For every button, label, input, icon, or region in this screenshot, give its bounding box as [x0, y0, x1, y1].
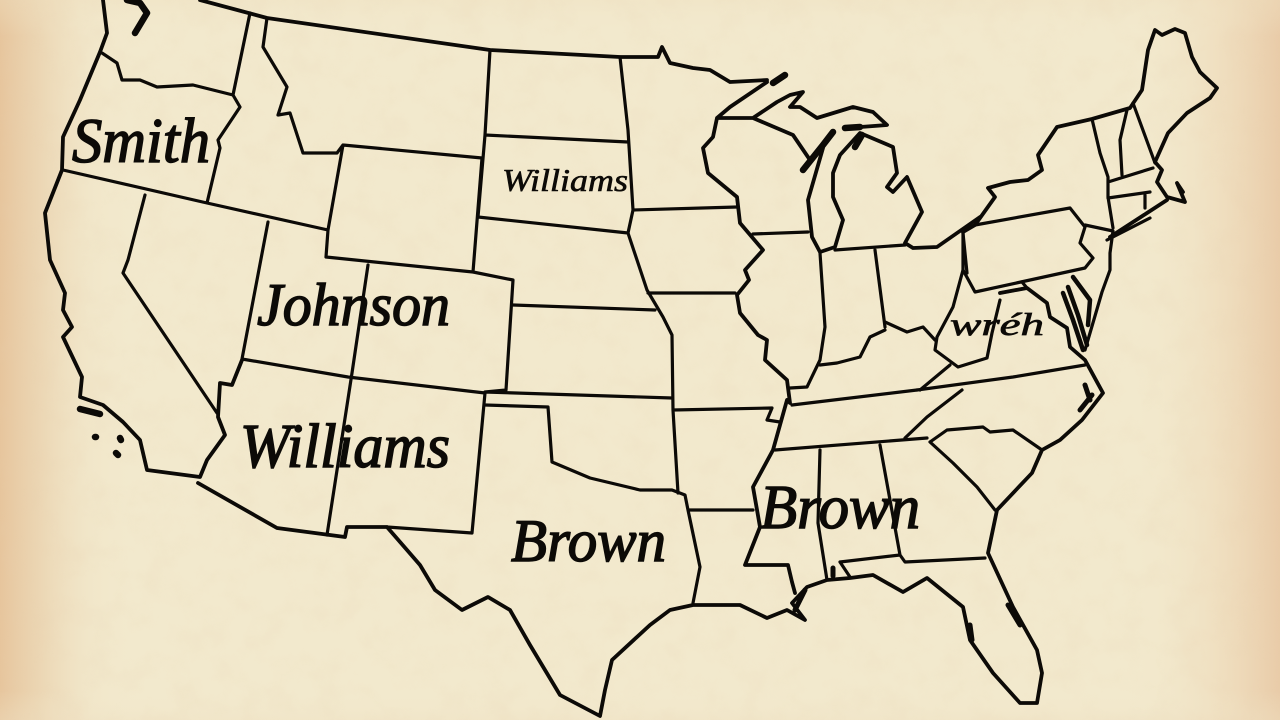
- label: Johnson: Johnson: [257, 272, 450, 338]
- central state borders: [478, 50, 780, 603]
- label: Williams, South Dakota: Williams: [502, 162, 628, 198]
- southwest border and Texas coast: [198, 288, 1103, 716]
- surname labels: [72, 105, 1044, 574]
- Green Bay and Straits: [803, 127, 862, 170]
- northeast state borders: [963, 103, 1155, 350]
- Upper Midwest and Great Lakes shore: [703, 82, 887, 593]
- label: Smith: Smith: [72, 105, 210, 176]
- West Virginia and Virginia borders: [885, 270, 1085, 438]
- label: West Virginia fragment: wréh: [950, 306, 1044, 342]
- Chesapeake Bay: [1063, 277, 1090, 350]
- Lake Michigan and Michigan: [808, 133, 980, 252]
- eastern state borders: [753, 232, 1042, 580]
- New York and New England outline: [963, 29, 1217, 237]
- western state borders: [63, 13, 672, 535]
- northern border: [200, 0, 767, 82]
- label: Brown, Texas: Brown: [511, 508, 666, 574]
- label: Williams, Southwest: Williams: [240, 413, 450, 481]
- Pacific coast: [45, 0, 242, 477]
- Puget Sound: [127, 0, 147, 33]
- Lake Superior island: [773, 75, 785, 83]
- label: Brown, Southeast: Brown: [760, 474, 920, 542]
- Gulf and Atlantic coast details: [795, 385, 1092, 640]
- Channel Islands: [80, 409, 121, 455]
